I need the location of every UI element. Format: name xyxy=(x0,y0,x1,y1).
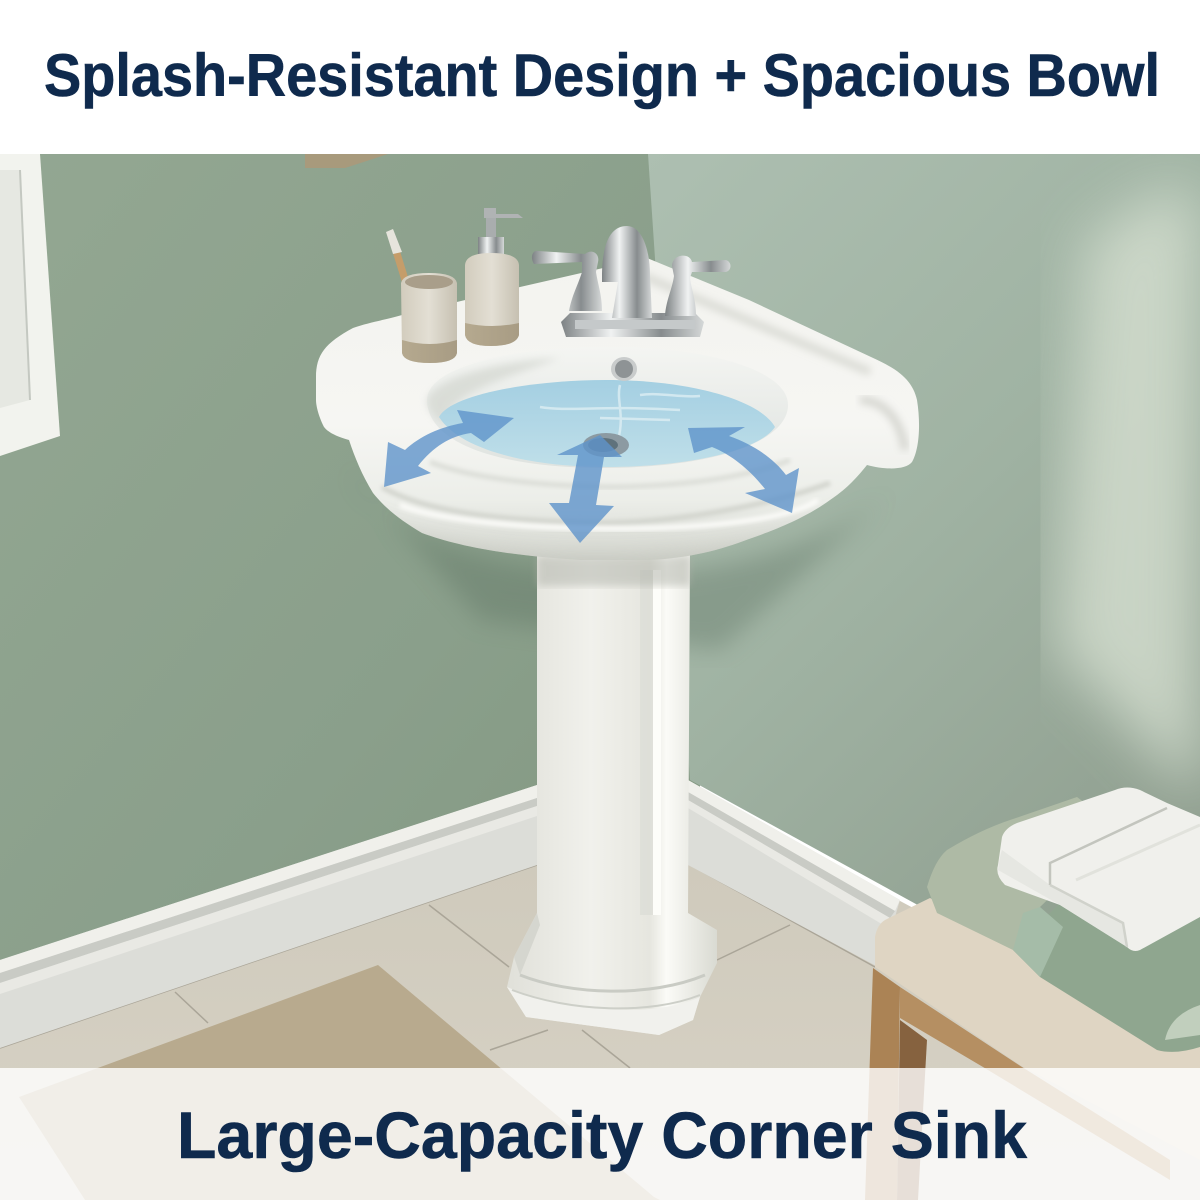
arrow: right xyxy=(688,427,799,513)
arrow: centre xyxy=(549,435,622,543)
bench xyxy=(865,898,1200,1200)
baseboard left xyxy=(0,785,537,1048)
pedestal column xyxy=(507,550,717,1035)
bottom caption band xyxy=(0,1068,1200,1200)
bath mat xyxy=(19,965,660,1200)
right wall xyxy=(648,154,1200,1060)
drain xyxy=(583,433,629,457)
spout xyxy=(602,226,652,318)
overflow xyxy=(611,357,637,381)
caption: Large-Capacity Corner Sink xyxy=(177,1098,1027,1172)
window trim xyxy=(0,154,60,456)
arrow: left xyxy=(384,410,514,487)
sink body xyxy=(316,258,919,560)
bench cushion xyxy=(875,898,1200,1160)
sunlight on right wall xyxy=(1055,190,1200,800)
deck plate xyxy=(561,313,704,337)
baseboard right xyxy=(688,780,900,968)
bench apron xyxy=(900,987,1170,1180)
toothbrush xyxy=(386,229,412,292)
floor tile lines xyxy=(0,865,875,1068)
green towel xyxy=(927,797,1200,1052)
sink shading xyxy=(421,532,746,560)
basin exterior xyxy=(316,258,919,560)
towel light side xyxy=(927,797,1120,950)
faucet xyxy=(532,226,730,337)
left handle xyxy=(532,251,602,311)
water xyxy=(439,380,775,467)
towel dark folded side xyxy=(1013,890,1200,1052)
top white band xyxy=(0,0,1200,154)
picture frame xyxy=(305,154,388,168)
splash arrows xyxy=(384,410,799,543)
white towel xyxy=(997,788,1200,951)
left wall xyxy=(0,154,700,1000)
towel fold end xyxy=(1165,1005,1200,1040)
tumbler xyxy=(401,273,457,363)
bench leg xyxy=(865,968,900,1200)
sink shadow on wall xyxy=(350,470,905,650)
floor xyxy=(0,865,1200,1200)
towel stripe xyxy=(1013,907,1063,977)
right handle xyxy=(665,256,730,316)
soap dispenser xyxy=(465,208,523,346)
bowl xyxy=(427,347,788,468)
water ripples xyxy=(540,385,700,440)
